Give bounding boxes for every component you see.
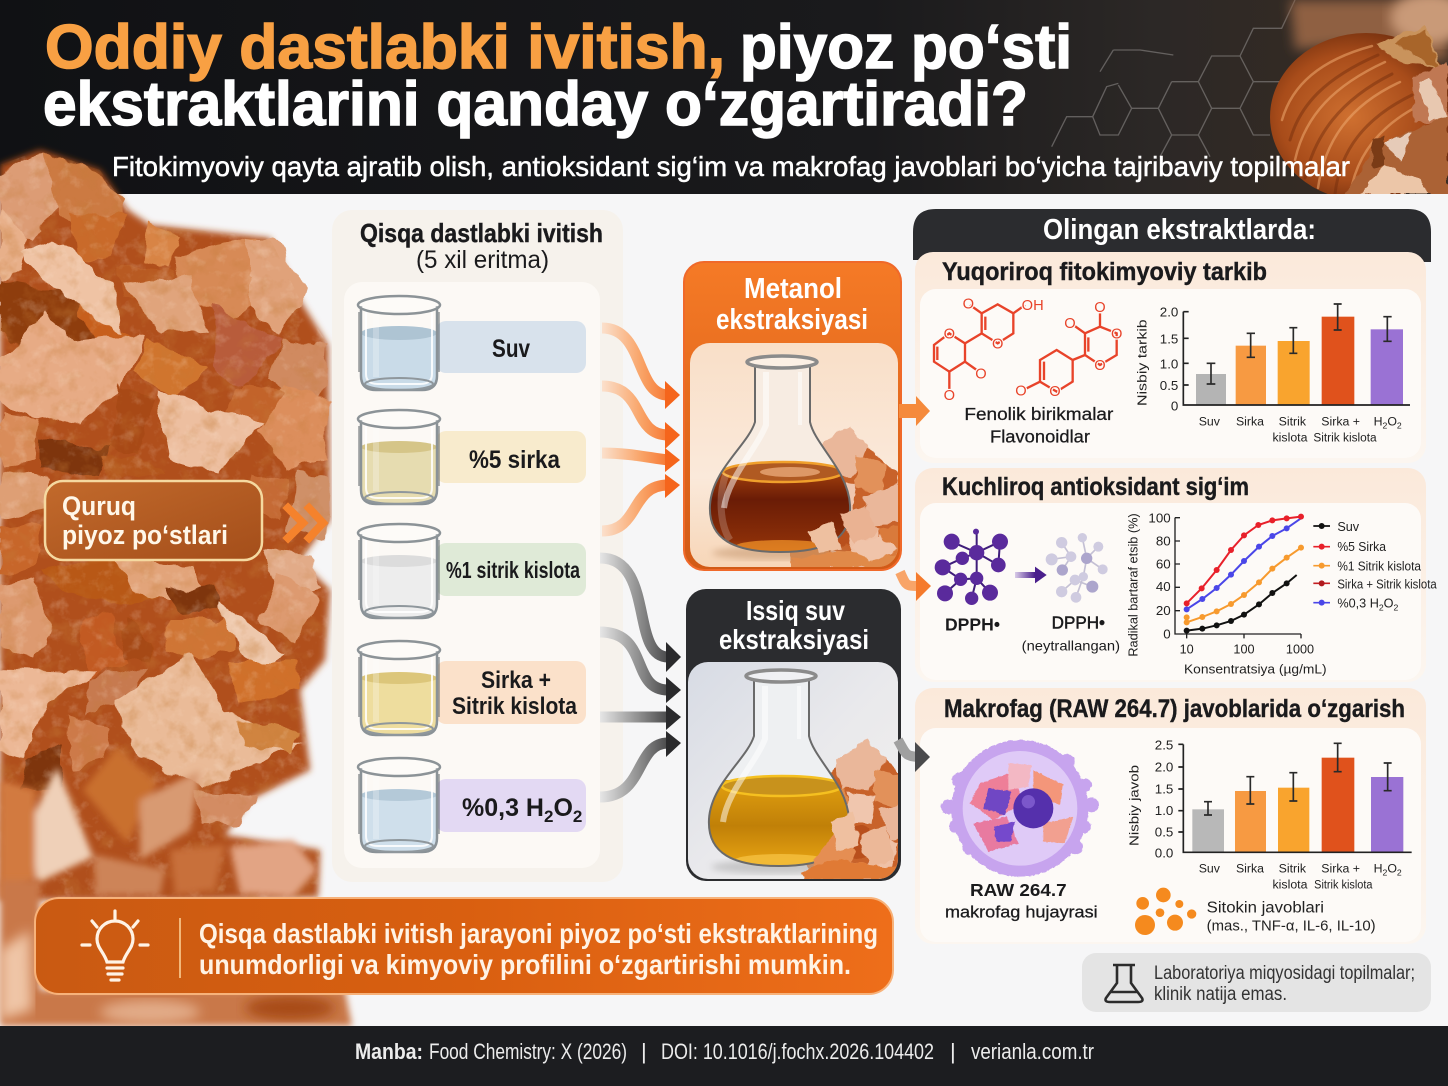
note: laboratory-scale findings	[1082, 953, 1431, 1012]
blurred foreground shards	[0, 747, 317, 900]
skin mottled texture	[0, 150, 335, 900]
bar chart: relative response: Suv	[1199, 862, 1221, 876]
footer source line: DOI: 10.1016/j.fochx.2026.104402	[661, 1039, 934, 1064]
icon: phenolic molecules: O	[944, 388, 955, 404]
icon: phenolic molecules: O	[975, 366, 987, 382]
bar chart: relative response: 0.5	[1155, 825, 1173, 840]
bar chart: relative response: Sitrik	[1279, 862, 1307, 876]
bar chart: relative content: Suv	[1199, 415, 1221, 429]
arrows: solutions to methanol extraction	[602, 328, 680, 531]
cytokine caption	[1207, 900, 1376, 935]
chart legend: %5 Sirka	[1337, 540, 1387, 554]
label: 0.3% H2O2: 2	[544, 807, 553, 826]
bar chart: relative content: 0.5	[1160, 378, 1178, 393]
panel heading: (5 xil eritma)	[416, 246, 549, 274]
line chart: radical scavenging: 100	[1148, 511, 1171, 526]
chart legend: %1 Sitrik kislota	[1337, 560, 1422, 574]
bar chart: relative response: Sirka +	[1321, 862, 1360, 876]
label: water: Suv	[492, 335, 530, 363]
onion skins beside the flask	[790, 427, 902, 570]
bar chart: relative response: 0.0	[1155, 846, 1173, 861]
label: 5% vinegar	[436, 431, 586, 483]
line chart: radical scavenging: 0	[1163, 626, 1171, 641]
sharp shards	[0, 152, 330, 825]
heading: methanol: Metanol	[744, 273, 842, 305]
beaker: mixture	[358, 641, 440, 735]
line chart: radical scavenging: Konsentratsiya (µg/mL)	[1184, 661, 1327, 676]
panel: hot water extraction	[686, 589, 920, 883]
title	[43, 13, 1072, 139]
icon: phenolic molecules: O	[1015, 383, 1027, 399]
bar chart: relative response: O	[1387, 862, 1397, 876]
onion skins in front of the flask	[800, 812, 898, 879]
note text: klinik natija emas.	[1154, 984, 1287, 1005]
bar chart: relative response: kislota	[1273, 877, 1308, 891]
icon: phenolic molecules: O	[963, 297, 974, 313]
line chart: radical scavenging: 10	[1180, 642, 1194, 656]
molecule caption: Flavonoidlar	[990, 426, 1090, 446]
chart legend: %0,3 H	[1337, 597, 1379, 611]
heading: hot water: ekstraksiyasi	[719, 624, 869, 655]
line chart: radical scavenging: Radikal bartaraf etsib (%)	[1126, 513, 1140, 657]
panel header: obtained extracts	[913, 209, 1431, 262]
icon: phenolic molecules: O	[1111, 327, 1122, 343]
title: piyoz po‘sti	[740, 13, 1072, 82]
bar chart: relative response	[1126, 737, 1412, 891]
label: 5% vinegar: %5 sirka	[469, 446, 561, 474]
panel heading: Makrofag (RAW 264.7) javoblarida o‘zgarish	[944, 695, 1405, 723]
bar chart: relative content: 2.0	[1160, 305, 1178, 320]
icon: phenolic molecules: O	[1049, 384, 1061, 400]
flask: methanol extract	[700, 356, 860, 560]
blur below the callout	[0, 880, 352, 1026]
label: 0.3% H2O2	[436, 779, 586, 832]
icon: DPPH radical molecule	[935, 529, 1008, 605]
panel: macrophage responses	[915, 688, 1426, 944]
bar chart: relative content: 1.0	[1160, 356, 1178, 371]
input box: dry onion skins: Quruq	[62, 491, 136, 521]
bar chart: relative content: kislota	[1273, 431, 1308, 445]
label: 1% citric acid: %1 sitrik kislota	[446, 557, 580, 583]
bar chart: relative content: 2	[1382, 420, 1387, 430]
input box: dry onion skins: piyoz po‘stlari	[62, 520, 228, 550]
panel: stronger antioxidant capacity	[915, 468, 1438, 682]
label: 0.3% H2O2: %0,3 H	[462, 794, 544, 822]
arrow: neutralisation	[1015, 567, 1047, 583]
title: Oddiy dastlabki ivitish,	[45, 13, 725, 82]
bar chart: relative content: H	[1374, 415, 1382, 429]
callout: key takeaway	[35, 898, 893, 994]
bar chart: relative content: O	[1387, 415, 1397, 429]
onion skins in front of the flask	[790, 505, 898, 567]
footer source line: |	[950, 1039, 956, 1064]
line chart: radical scavenging: 20	[1156, 603, 1171, 618]
flask: hot water extract	[699, 670, 859, 874]
cytokine caption: (mas., TNF-α, IL-6, IL-10)	[1207, 919, 1376, 935]
arrows: solutions to hot-water extraction	[600, 558, 681, 797]
footer source line: |	[641, 1039, 647, 1064]
panel: methanol extraction	[684, 262, 902, 570]
soft shadow base of the pile	[0, 150, 330, 900]
title: ekstraktlarini qanday o‘zgartiradi?	[43, 70, 1028, 139]
DPPH captions	[945, 612, 1120, 654]
heading: methanol	[716, 273, 868, 336]
takeaway text: unumdorligi va kimyoviy profilini o‘zgartirishi mumkin.	[199, 949, 851, 980]
beaker: hydrogen peroxide	[358, 758, 440, 852]
panel header: obtained extracts: Olingan ekstraktlarda:	[1043, 214, 1316, 246]
bar chart: relative response: 1.5	[1155, 781, 1173, 796]
panel heading: Kuchliroq antioksidant sig‘im	[942, 473, 1249, 501]
panel heading: Yuqoriroq fitokimyoviy tarkib	[942, 258, 1267, 286]
header band	[0, 0, 1448, 194]
icon: neutralised molecule	[1046, 533, 1108, 603]
bar chart: relative content: Sitrik kislota	[1313, 431, 1377, 445]
arrow: methanol to antioxidant panel	[900, 572, 931, 601]
label: vinegar + citric acid: Sirka +	[481, 667, 551, 694]
bar chart: relative content	[1135, 304, 1410, 445]
bar chart: relative content: Sirka +	[1321, 415, 1360, 429]
molecule caption: Fenolik birikmalar	[964, 404, 1113, 424]
icon: phenolic molecules: O	[944, 327, 955, 343]
panel heading	[360, 218, 603, 274]
panel: higher phytochemical content	[915, 252, 1426, 463]
footer band	[0, 1026, 1448, 1086]
arrow: hot water to macrophage panel	[898, 740, 930, 772]
label: vinegar + citric acid: Sitrik kislota	[452, 693, 578, 720]
line chart: radical scavenging: 100	[1233, 642, 1255, 656]
cell caption: RAW 264.7	[970, 880, 1067, 900]
line chart: radical scavenging: 80	[1156, 533, 1171, 548]
heading: hot water: Issiq suv	[746, 595, 845, 626]
arrow: methanol to phytochemical panel	[899, 396, 930, 426]
label: water	[436, 321, 586, 373]
line chart: radical scavenging	[1126, 511, 1327, 676]
bar chart: relative content: 0	[1171, 399, 1178, 414]
footer source line: verianla.com.tr	[971, 1039, 1094, 1064]
panel heading: Qisqa dastlabki ivitish	[360, 218, 603, 248]
panel: soaking solutions	[332, 210, 623, 882]
bar chart: relative response: 2	[1382, 867, 1387, 877]
icon: phenolic molecules: O	[992, 337, 1003, 353]
beaker: citric acid	[358, 524, 440, 618]
bar chart: relative response: 2.0	[1155, 760, 1173, 775]
photo: pile of dry onion skins	[0, 150, 352, 1026]
bar chart: relative response: Nisbiy javob	[1126, 765, 1141, 846]
icon: lab flask	[1106, 965, 1142, 1002]
icon: phenolic molecules	[934, 297, 1122, 404]
footer source line	[355, 1039, 1094, 1064]
chart legend: 2	[1379, 602, 1384, 612]
bar chart: relative content: Sitrik	[1279, 415, 1307, 429]
heading: methanol: ekstraksiyasi	[716, 304, 868, 336]
icon: macrophage cell	[941, 740, 1099, 877]
beaker: vinegar	[358, 410, 440, 504]
line chart: radical scavenging: 60	[1156, 556, 1171, 571]
cell caption: makrofag hujayrasi	[945, 902, 1098, 921]
bar chart: relative response: 2	[1397, 867, 1402, 877]
cell caption	[945, 880, 1098, 921]
note text	[1154, 963, 1415, 1005]
bar chart: relative response: Sitrik kislota	[1314, 877, 1373, 891]
hexagon pattern	[1052, 0, 1295, 157]
onion skins beside the flask	[806, 738, 898, 879]
input box: dry onion skins	[45, 481, 262, 560]
label: 1% citric acid	[436, 543, 586, 596]
chart legend: O	[1384, 597, 1394, 611]
icon: phenolic molecules: OH	[1022, 298, 1044, 314]
bar chart: relative response: 1.0	[1155, 803, 1173, 818]
icon: light bulb	[82, 911, 148, 980]
subtitle: Fitokimyoviy qayta ajratib olish, antioksidant sig‘im va makrofag javoblari bo‘yicha tajribaviy topilmalar	[112, 151, 1350, 182]
DPPH captions: DPPH•	[945, 615, 1000, 635]
cytokine caption: Sitokin javoblari	[1207, 900, 1324, 917]
footer source line: Food Chemistry: X (2026)	[429, 1039, 627, 1064]
label: vinegar + citric acid	[436, 661, 586, 724]
chart legend: Sirka + Sitrik kislota	[1337, 577, 1438, 591]
icon: phenolic molecules: O	[1094, 300, 1106, 316]
DPPH captions: (neytrallangan)	[1022, 638, 1120, 654]
line chart: radical scavenging: 1000	[1286, 642, 1314, 656]
bar chart: relative response: 2.5	[1155, 737, 1173, 752]
bar chart: relative response: H	[1374, 862, 1382, 876]
chart legend: 2	[1394, 602, 1399, 612]
chart legend: Suv	[1337, 520, 1360, 534]
molecule caption	[964, 404, 1113, 446]
bar chart: relative content: 1.5	[1160, 331, 1178, 346]
line chart: radical scavenging: 40	[1156, 579, 1171, 594]
icon: phenolic molecules: O	[1064, 316, 1076, 332]
header photo: onions	[1270, 0, 1448, 201]
chart legend	[1313, 520, 1438, 612]
icon: cytokine dots	[1135, 888, 1196, 935]
bar chart: relative content: Nisbiy tarkib	[1135, 319, 1150, 406]
bar chart: relative content: Sirka	[1236, 415, 1264, 429]
heading: hot water	[719, 595, 869, 655]
beaker: water	[358, 296, 440, 390]
takeaway text	[199, 918, 878, 980]
label: 0.3% H2O2: 2	[573, 807, 582, 826]
bar chart: relative content: 2	[1397, 420, 1402, 430]
icon: double chevron	[288, 508, 323, 538]
takeaway text: Qisqa dastlabki ivitish jarayoni piyoz po‘sti ekstraktlarining	[199, 918, 878, 949]
DPPH captions: DPPH•	[1052, 612, 1105, 632]
label: 0.3% H2O2: O	[553, 794, 573, 822]
footer source line: Manba:	[355, 1039, 423, 1064]
icon: phenolic molecules: O	[1094, 358, 1106, 374]
bar chart: relative response: Sirka	[1236, 862, 1264, 876]
